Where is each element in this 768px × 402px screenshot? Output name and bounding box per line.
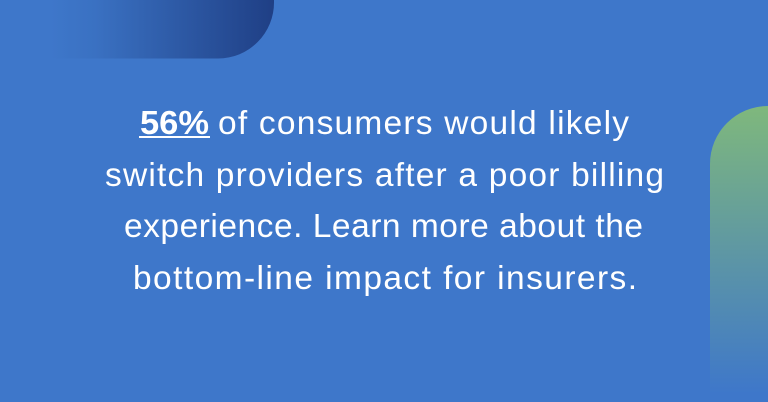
line 4: bottom-line impact for insurers.: [133, 260, 637, 297]
line 1: remainder: of consumers would likely: [218, 105, 629, 142]
decorative navy gradient shape, top left: [50, 0, 274, 58]
line 3: experience. Learn more about the: [124, 208, 643, 245]
decorative green gradient shape, right edge: [710, 106, 768, 394]
line 2: switch providers after a poor billing: [105, 157, 664, 194]
line 1: highlighted statistic: 56%: [140, 105, 209, 142]
headline text block: [105, 105, 664, 297]
